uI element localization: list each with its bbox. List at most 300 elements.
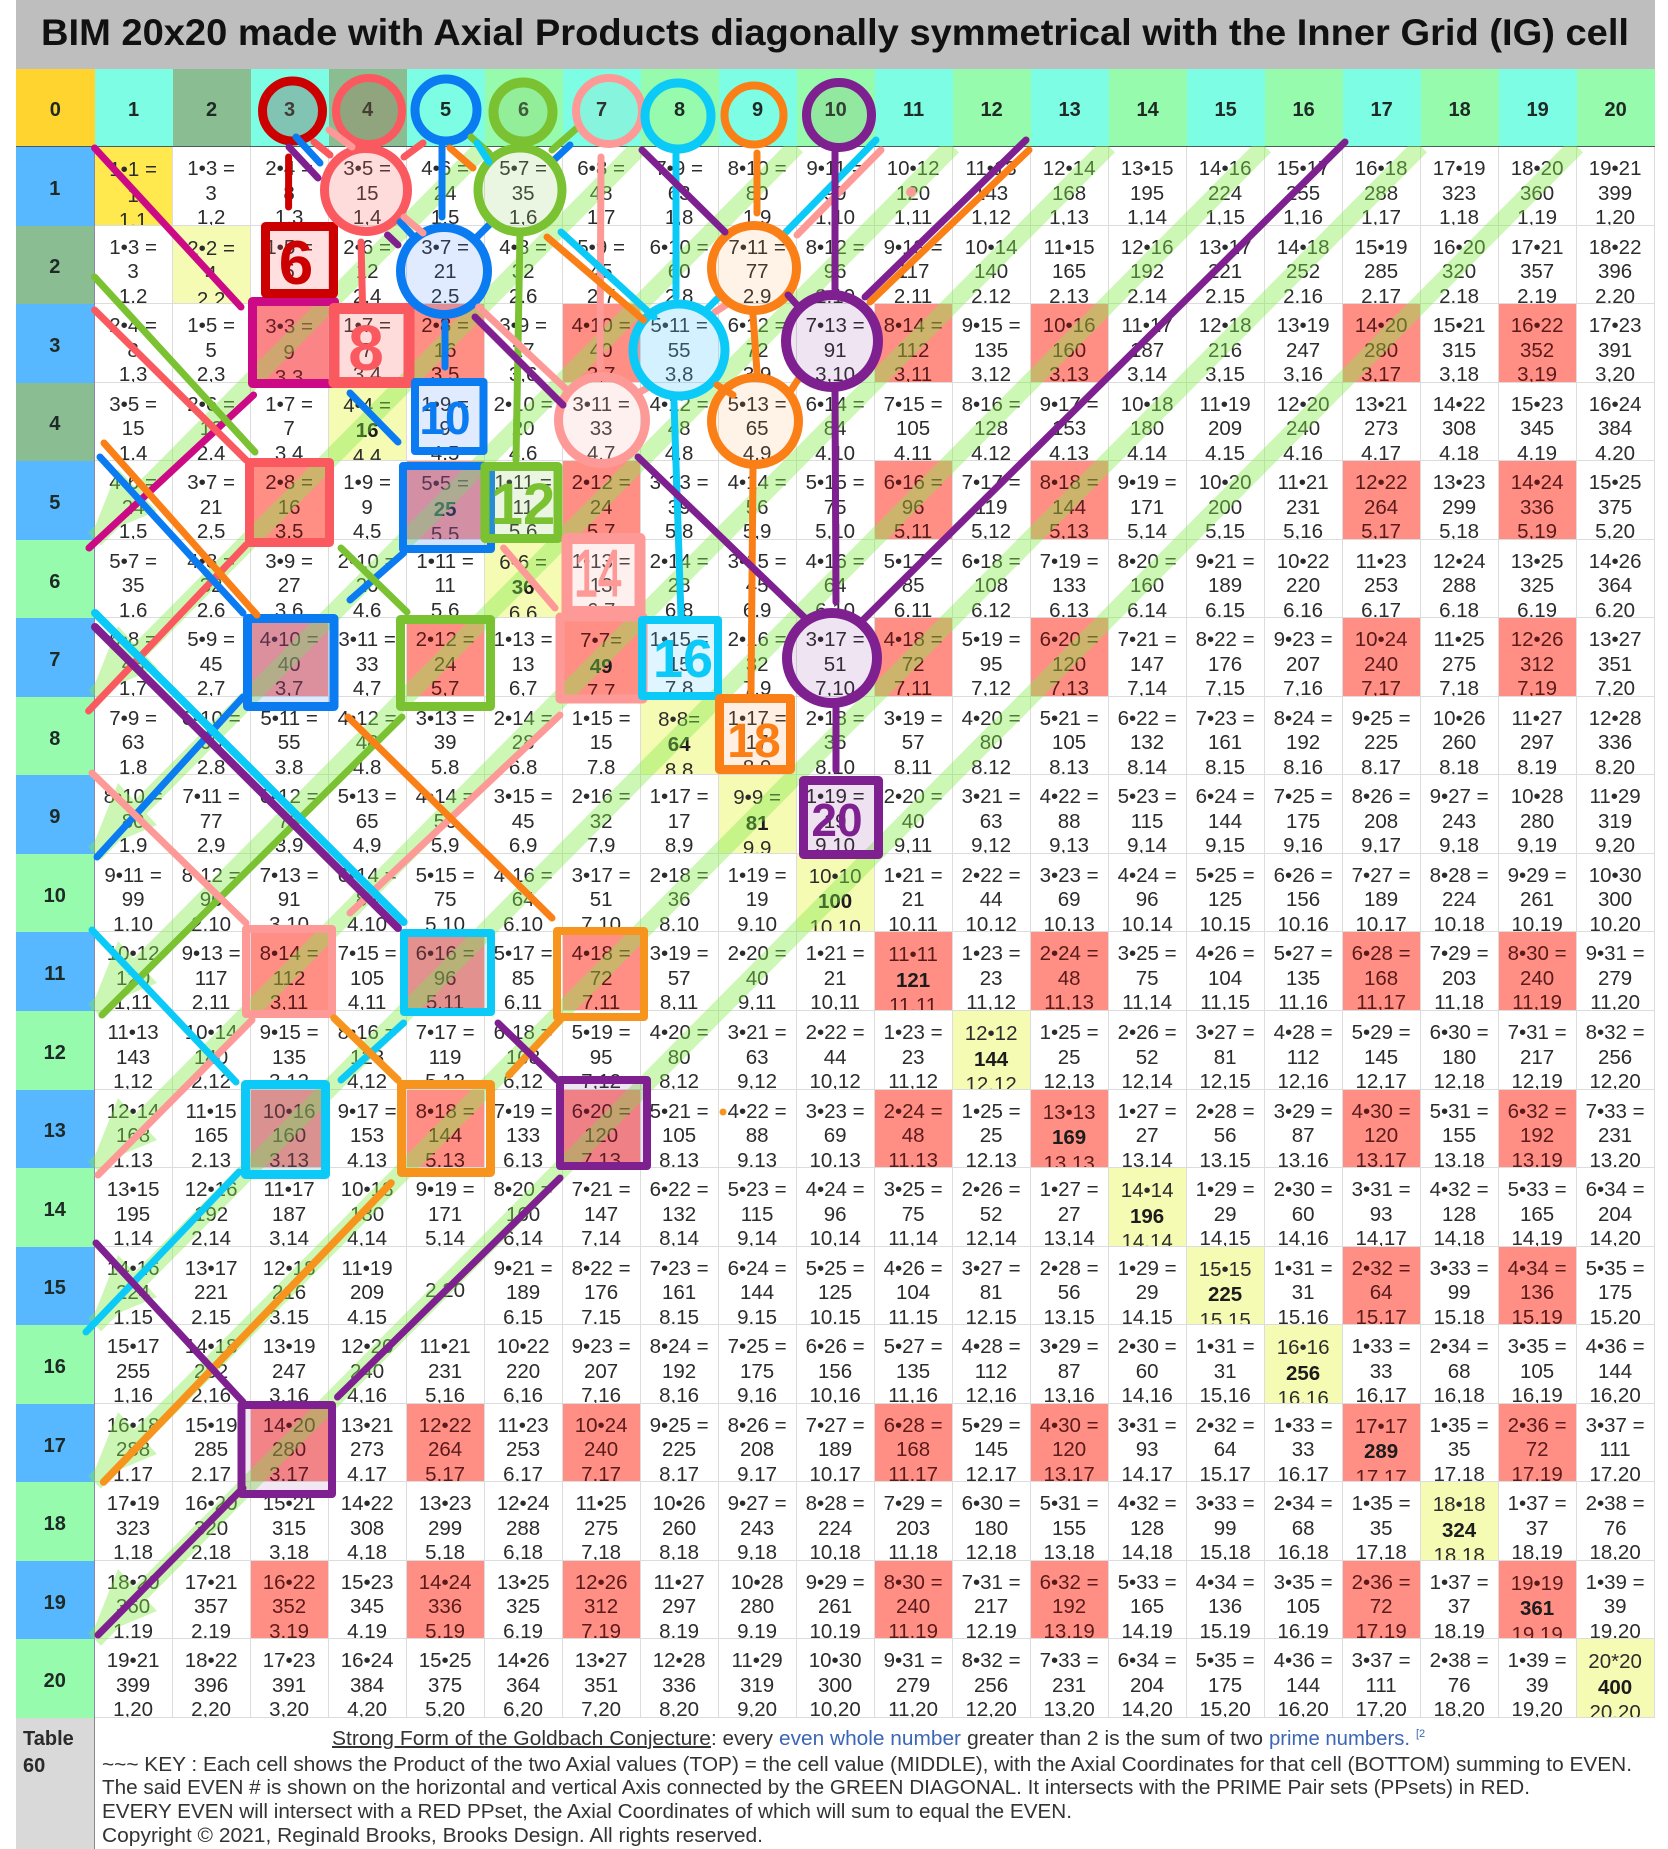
row 6: 6 [49, 570, 60, 592]
row 15: 2,20 [425, 1279, 465, 1302]
row 9: 81 [746, 812, 768, 835]
row 2: 13•17 [1199, 236, 1251, 259]
row 4: 15•23 [1511, 393, 1563, 416]
row 13: 105 [662, 1124, 696, 1147]
circle: axis 10 [806, 82, 872, 148]
row 15: 176 [584, 1281, 618, 1304]
row 6: 1•13 = [572, 550, 631, 573]
row 17: 264 [428, 1438, 462, 1461]
row 19: 1•39 = [1586, 1571, 1645, 1594]
row 15: 104 [896, 1281, 930, 1304]
column axis header: 11 [903, 99, 924, 121]
row 5: 56 [746, 496, 768, 519]
row 2: 11•15 [1043, 236, 1095, 259]
row 19: 297 [662, 1595, 696, 1618]
row 20: 11•29 [731, 1649, 783, 1672]
row 12: 135 [272, 1046, 306, 1069]
row 12: 81 [1214, 1046, 1236, 1069]
row 13 [16, 1090, 1655, 1168]
row 8: 192 [1286, 731, 1320, 754]
row 4: 209 [1208, 417, 1242, 440]
row 8: 39 [434, 731, 456, 754]
row 19: 2•36 = [1352, 1571, 1411, 1594]
row 12: 44 [824, 1046, 846, 1069]
row 19: 165 [1130, 1595, 1164, 1618]
row 10: 5•25 = [1196, 864, 1255, 887]
row 8: 260 [1442, 731, 1476, 754]
row 12: 12•12 [965, 1022, 1017, 1045]
row 12: 6•18 = [494, 1021, 553, 1044]
row 11: 6•16 = [416, 942, 475, 965]
row 15: 29 [1136, 1281, 1158, 1304]
row 20: 7•33 = [1040, 1649, 1099, 1672]
row 13: 7•19 = [494, 1100, 553, 1123]
row 6: 12•24 [1433, 550, 1485, 573]
row 11: 9•13 = [182, 942, 241, 965]
row 20: 18•22 [185, 1649, 237, 1672]
row 19: 19 [44, 1592, 66, 1614]
row 14: 14 [44, 1199, 66, 1221]
row 4: 384 [1598, 417, 1632, 440]
row 3: 315 [1442, 339, 1476, 362]
row 2: 285 [1364, 260, 1398, 283]
row 1: 24 [434, 182, 456, 204]
number 10: 10 [419, 392, 471, 444]
row 15: 81 [980, 1281, 1002, 1304]
circle: axis 3 [262, 81, 322, 141]
row 1: 17•19 [1433, 157, 1485, 180]
row 2: 18•22 [1589, 236, 1641, 259]
row 15: 2•32 = [1352, 1257, 1411, 1280]
row 11: 11•11 [888, 943, 938, 966]
row 3: 14•20 [1355, 314, 1407, 337]
row 13: 7•33 = [1586, 1100, 1645, 1123]
row 18: 37 [1526, 1517, 1548, 1540]
row 20: 15•25 [419, 1649, 471, 1672]
row 18: 68 [1292, 1517, 1314, 1540]
row 7 [16, 618, 1655, 697]
circle: axis 6 [494, 82, 552, 142]
row 15: 99 [1448, 1281, 1470, 1304]
row 1: 9•11 = [806, 157, 864, 180]
row 14: 3•31 = [1352, 1178, 1411, 1201]
row 20: 20 [44, 1670, 66, 1692]
row 16: 6•26 = [806, 1335, 865, 1358]
row 14: 5•33 = [1508, 1178, 1567, 1201]
row 3: 5 [205, 339, 217, 362]
column axis header: 18 [1448, 99, 1471, 121]
row 9: 144 [1208, 810, 1242, 833]
row 11: 279 [1598, 967, 1632, 990]
row 7: 4•10 = [260, 628, 319, 651]
row 11: 3•19 = [650, 942, 709, 965]
row 1: 63 [668, 182, 690, 204]
row 16: 207 [584, 1360, 618, 1383]
row 7: 49 [590, 655, 612, 678]
row 20 [16, 1639, 1655, 1718]
row 13: 169 [1052, 1126, 1086, 1149]
row 10: 189 [1364, 888, 1398, 911]
row 11: 1•23 = [962, 942, 1021, 965]
row 20: 375 [428, 1674, 462, 1697]
row 15: 56 [1058, 1281, 1080, 1304]
row 7: 15 [668, 653, 690, 676]
row 4: 12 [200, 417, 222, 440]
row 6: 6•18 = [962, 550, 1021, 573]
annotation: green even 12 [95, 82, 577, 1015]
circle: cell 3•5 [324, 148, 408, 232]
row 10 [16, 854, 1655, 932]
row 7: 2•16 = [728, 628, 787, 651]
row 3: 9 [283, 341, 295, 364]
row 16: 1•31 = [1196, 1335, 1255, 1358]
row 1: 1•3 = [187, 157, 235, 180]
row 11: 72 [590, 967, 612, 990]
row 14: 2•30 = [1274, 1178, 1333, 1201]
row 1: 195 [1130, 182, 1164, 204]
row 16: 68 [1448, 1360, 1470, 1383]
row 10: 2•18 = [650, 864, 709, 887]
row 13: 5•31 = [1430, 1100, 1489, 1123]
row 11: 2•20 = [728, 942, 787, 965]
row 10: 8•12 = [182, 864, 241, 887]
row 14: 160 [506, 1203, 540, 1226]
row 5: 119 [975, 496, 1007, 519]
row 15: 4•34 = [1508, 1257, 1567, 1280]
row 16: 255 [116, 1360, 150, 1383]
row 17: 1•35 = [1430, 1414, 1489, 1437]
row 7: 240 [1364, 653, 1398, 676]
row 13: 6•32 = [1508, 1100, 1567, 1123]
row 10: 36 [668, 888, 690, 911]
row 11: 4•18 = [572, 942, 631, 965]
row 2: 60 [668, 260, 690, 283]
row 4: 308 [1442, 417, 1476, 440]
column axis header: 1 [128, 99, 139, 121]
row 13: 9•17 = [338, 1100, 397, 1123]
row 17: 17•17 [1355, 1415, 1407, 1438]
row 4: 2•6 = [187, 393, 235, 416]
row 13: 10•16 [263, 1100, 315, 1123]
row 7: 13 [512, 653, 534, 676]
row 7: 1•15 = [650, 628, 709, 651]
row 11: 5•27 = [1274, 942, 1333, 965]
Goldbach statement [332, 1728, 1425, 1750]
row 4: 1•7 = [265, 393, 313, 416]
row 4: 13•21 [1355, 393, 1407, 416]
row 9: 175 [1286, 810, 1320, 833]
row 14: 6•22 = [650, 1178, 709, 1201]
row 7: 7•7= [580, 629, 622, 652]
row 17: 145 [974, 1438, 1008, 1461]
row 7: 12•26 [1511, 628, 1563, 651]
amber connector lines [104, 1018, 560, 1482]
row 4: 20 [512, 417, 534, 440]
row 20: 231 [1052, 1674, 1086, 1697]
row 13: 155 [1442, 1124, 1476, 1147]
row 17: 14•20 [263, 1414, 315, 1437]
row 1: 12•14 [1043, 157, 1095, 180]
row 8: 60 [200, 731, 222, 754]
row 17 [16, 1404, 1655, 1482]
row 4: 9•17 = [1040, 393, 1099, 416]
row 12: 4•20 = [650, 1021, 709, 1044]
row 19: 17•21 [185, 1571, 237, 1594]
row 13: 231 [1598, 1124, 1632, 1147]
row 16: 11•21 [419, 1335, 471, 1358]
row 11: 104 [1208, 967, 1242, 990]
row 1: 15 [356, 182, 378, 204]
row 1: 80 [746, 182, 768, 204]
column axis header: 17 [1370, 99, 1393, 121]
row 6: 28 [668, 574, 690, 597]
row 5: 24 [590, 496, 612, 519]
row 9: 17 [668, 810, 690, 833]
row 3 [16, 304, 1655, 383]
row 2: 7•11 = [728, 236, 786, 259]
row 1: 15•17 [1277, 157, 1329, 180]
row 6: 64 [824, 574, 846, 597]
column axis header: 13 [1058, 99, 1081, 121]
box: cell 4•10 [248, 618, 334, 706]
row 9: 9 [49, 806, 60, 828]
row 13: 165 [194, 1124, 228, 1147]
row 1: 6•8 = [577, 157, 625, 180]
row 5: 200 [1208, 496, 1242, 519]
row 6: 10•22 [1277, 550, 1329, 573]
row 11: 121 [896, 969, 930, 992]
row 2: 9•13 = [884, 236, 943, 259]
box: cell 8•18 [402, 1084, 490, 1172]
row 18 [16, 1482, 1655, 1561]
row 16: 1•33 = [1352, 1335, 1411, 1358]
row 20: 399 [116, 1674, 150, 1697]
row 5: 9 [361, 496, 373, 519]
row 18: 323 [116, 1517, 150, 1540]
row 1: 399 [1598, 182, 1632, 204]
row 11: 8•30 = [1508, 942, 1567, 965]
row 11: 203 [1442, 967, 1476, 990]
row 9: 72 [278, 810, 300, 833]
row 6: 160 [1130, 574, 1164, 597]
row 12: 145 [1364, 1046, 1398, 1069]
row 17: 120 [1052, 1438, 1086, 1461]
row 3: 3 [49, 335, 60, 357]
row 19: 72 [1370, 1595, 1392, 1618]
row 20: 400 [1598, 1676, 1632, 1699]
row 14: 7•21 = [572, 1178, 631, 1201]
row 1: 19•21 [1589, 157, 1641, 180]
row 15: 189 [506, 1281, 540, 1304]
row 2: 15•19 [1355, 236, 1407, 259]
row 4 [16, 383, 1655, 461]
row 2: 357 [1520, 260, 1554, 283]
row 9: 11•29 [1589, 785, 1641, 808]
row 15: 175 [1598, 1281, 1632, 1304]
row 10: 10•10 [809, 865, 861, 888]
row 1: 8 [283, 182, 295, 204]
row 12: 7•31 = [1508, 1021, 1567, 1044]
row 1: 224 [1208, 182, 1242, 204]
row 11: 7•29 = [1430, 942, 1489, 965]
column axis header: 0 [50, 99, 61, 121]
row 9: 88 [1058, 810, 1080, 833]
row 8 [16, 697, 1655, 775]
row 17: 240 [584, 1438, 618, 1461]
row 11: 120 [116, 967, 150, 990]
row 9: 45 [512, 810, 534, 833]
row 6: 108 [974, 574, 1008, 597]
row 19: 105 [1286, 1595, 1320, 1618]
row 1: 2•4 = [265, 157, 313, 180]
line: axis 3 to box [285, 157, 292, 207]
row 4: 105 [896, 417, 930, 440]
row 7: 5•19 = [962, 628, 1021, 651]
row 13: 48 [902, 1124, 924, 1147]
row 20: 20*20 [1588, 1650, 1642, 1673]
row 6 [16, 540, 1655, 618]
row 4: 153 [1052, 417, 1086, 440]
row 19: 345 [350, 1595, 384, 1618]
row 8: 8 [49, 728, 60, 750]
row 8: 57 [902, 731, 924, 754]
row 18: 243 [740, 1517, 774, 1540]
row 19: 352 [272, 1595, 306, 1618]
row 16: 5•27 = [884, 1335, 943, 1358]
row 10: 9•29 = [1508, 864, 1567, 887]
row 6: 6•6 = [499, 551, 547, 574]
row 3: 1•7 = [343, 314, 391, 337]
row 4: 10•18 [1121, 393, 1173, 416]
row 10: 6•14 = [338, 864, 397, 887]
row 14: 27 [1058, 1203, 1080, 1226]
row 11: 9•31 = [1586, 942, 1645, 965]
row 10: 8•28 = [1430, 864, 1489, 887]
row 11: 48 [1058, 967, 1080, 990]
circle: cell 7•11 [712, 226, 796, 310]
row 15: 209 [350, 1281, 384, 1304]
column axis header: 19 [1526, 99, 1549, 121]
row 17: 17 [44, 1435, 66, 1457]
row 7: 8•22 = [1196, 628, 1255, 651]
row 15: 6•24 = [728, 1257, 787, 1280]
row 7: 6•8 = [109, 628, 157, 651]
row 1: 120 [896, 182, 930, 204]
row 8: 10•26 [1433, 707, 1485, 730]
row 19: 357 [194, 1595, 228, 1618]
row 20: 279 [896, 1674, 930, 1697]
row 12: 5•19 = [572, 1021, 631, 1044]
row 17: 168 [896, 1438, 930, 1461]
row 11: 6•28 = [1352, 942, 1411, 965]
row 1: 3•5 = [343, 157, 391, 180]
row 19: 15•23 [341, 1571, 393, 1594]
row 6: 45 [746, 574, 768, 597]
row 17: 2•32 = [1196, 1414, 1255, 1437]
row 9: 280 [1520, 810, 1554, 833]
row 12: 108 [506, 1046, 540, 1069]
row 15: 31 [1292, 1281, 1314, 1304]
box: cell 5•5 [403, 466, 491, 549]
box: cell 1•13 [567, 538, 640, 612]
row 4: 4 [49, 413, 60, 435]
annotation: red even 6 [262, 81, 334, 298]
row 10: 1•19 = [728, 864, 787, 887]
row 5 [16, 461, 1655, 540]
row 10: 44 [980, 888, 1002, 911]
row 9: 7•25 = [1274, 785, 1333, 808]
row 3: 3•3 = [265, 315, 313, 338]
row 11: 40 [746, 967, 768, 990]
row 3: 2•8 = [421, 314, 469, 337]
row 19: 336 [428, 1595, 462, 1618]
row 7: 4•18 = [884, 628, 943, 651]
row 6: 220 [1286, 574, 1320, 597]
row 20: 76 [1448, 1674, 1470, 1697]
row 12: 119 [429, 1046, 461, 1069]
row 7: 5•9 = [187, 628, 235, 651]
row 8: 297 [1520, 731, 1554, 754]
row 8: 2•18 = [806, 707, 865, 730]
row 9: 6•24 = [1196, 785, 1255, 808]
row 6: 1•11 = [416, 550, 474, 573]
row 16: 175 [740, 1360, 774, 1383]
row 13: 3•23 = [806, 1100, 865, 1123]
row 12: 144 [974, 1048, 1008, 1071]
row 18: 180 [974, 1517, 1008, 1540]
number 8: 8 [348, 312, 384, 384]
row 7: 45 [200, 653, 222, 676]
title bar [16, 0, 1655, 69]
annotation: magenta even 6 pair [89, 148, 334, 548]
row 18: 1•35 = [1352, 1492, 1411, 1515]
row 15: 224 [116, 1281, 150, 1304]
row 18: 18 [44, 1513, 66, 1535]
row 11: 10•12 [107, 942, 159, 965]
row 9: 56 [434, 810, 456, 833]
row 16: 9•23 = [572, 1335, 631, 1358]
row 6: 2•14 = [650, 550, 709, 573]
row 9: 243 [1442, 810, 1476, 833]
row 9: 40 [902, 810, 924, 833]
row 1: 323 [1442, 182, 1476, 204]
row 1: 288 [1364, 182, 1398, 204]
row 18: 315 [272, 1517, 306, 1540]
row 5: 4•14 = [728, 471, 787, 494]
row 2: 10•14 [965, 236, 1017, 259]
row 6: 11•23 [1355, 550, 1407, 573]
row 2: 21 [434, 260, 456, 283]
row 19: 37 [1448, 1595, 1470, 1618]
row 12: 112 [1287, 1046, 1319, 1069]
row 19: 1•37 = [1430, 1571, 1489, 1594]
row 11: 240 [1520, 967, 1554, 990]
row 14: 6•34 = [1586, 1178, 1645, 1201]
row 17: 289 [1364, 1440, 1398, 1463]
row 5: 2•12 = [572, 471, 631, 494]
row 10: 125 [1208, 888, 1242, 911]
row 19: 280 [740, 1595, 774, 1618]
row 3: 15•21 [1433, 314, 1485, 337]
row 4: 11•19 [1199, 393, 1251, 416]
row 4: 16•24 [1589, 393, 1641, 416]
row 10: 96 [200, 888, 222, 911]
row 9: 5•23 = [1118, 785, 1177, 808]
row 18: 11•25 [575, 1492, 627, 1515]
row 20: 2•38 = [1430, 1649, 1489, 1672]
row 15: 216 [272, 1281, 306, 1304]
orange connector lines [104, 148, 1029, 918]
